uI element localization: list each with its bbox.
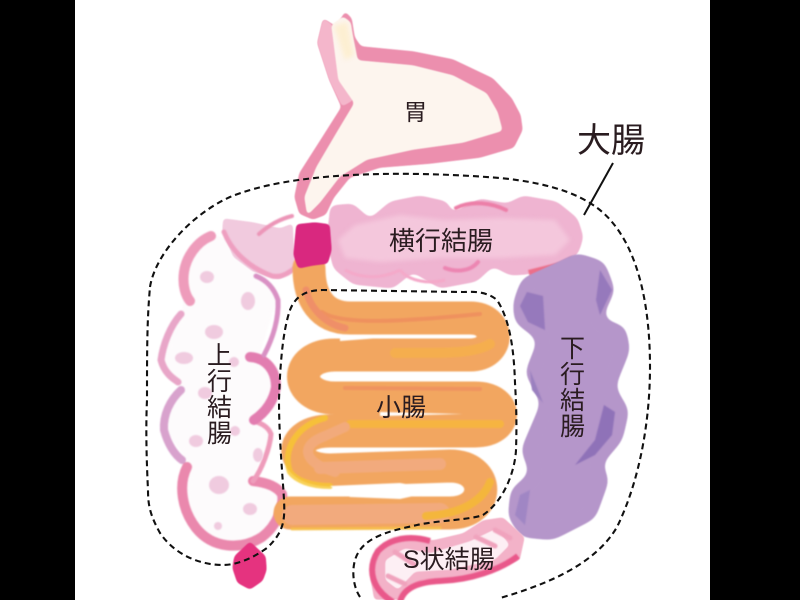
label: ascending colon: 結 bbox=[207, 394, 232, 422]
icon: sigmoid colon bbox=[370, 517, 525, 600]
white page panel bbox=[75, 0, 710, 600]
label: stomach: 胃 bbox=[404, 99, 427, 125]
label: ascending colon: 腸 bbox=[207, 420, 232, 448]
descending colon shading bbox=[520, 292, 545, 330]
ascending colon dots bbox=[175, 271, 263, 530]
small intestine white slits bbox=[330, 335, 463, 499]
label: small intestine: 小腸 bbox=[376, 394, 426, 422]
icon: pylorus magenta block bbox=[293, 222, 332, 269]
ascending colon wall segments bbox=[161, 236, 282, 546]
icon: colon fold near hepatic flexure bbox=[222, 216, 295, 280]
icon: transverse colon bbox=[326, 195, 584, 289]
label: ascending colon: 上 bbox=[207, 342, 232, 370]
label: transverse colon: 横行結腸 bbox=[389, 226, 493, 256]
icon: descending colon bbox=[507, 252, 631, 541]
label: large intestine: 大腸 bbox=[577, 122, 645, 160]
transverse colon dark accents bbox=[456, 203, 506, 210]
label: descending colon: 行 bbox=[560, 361, 585, 389]
icon: appendix bbox=[232, 541, 267, 590]
icon: small intestine bbox=[288, 268, 500, 529]
label: descending colon: 腸 bbox=[560, 413, 585, 441]
icon: ascending colon bbox=[160, 233, 282, 547]
label: descending colon: 結 bbox=[560, 387, 585, 415]
ascending colon body bbox=[160, 233, 282, 547]
dashed outline: large intestine region bbox=[146, 174, 650, 598]
sigmoid colon rungs bbox=[388, 530, 510, 584]
label: sigmoid colon: S状結腸 bbox=[403, 546, 495, 574]
label: ascending colon: 行 bbox=[207, 368, 232, 396]
leader line: large intestine label bbox=[584, 163, 613, 215]
small intestine brush streaks bbox=[288, 290, 500, 529]
sigmoid colon dark wall bbox=[372, 538, 518, 600]
label: descending colon: 下 bbox=[560, 335, 585, 363]
icon: stomach bbox=[294, 11, 523, 220]
